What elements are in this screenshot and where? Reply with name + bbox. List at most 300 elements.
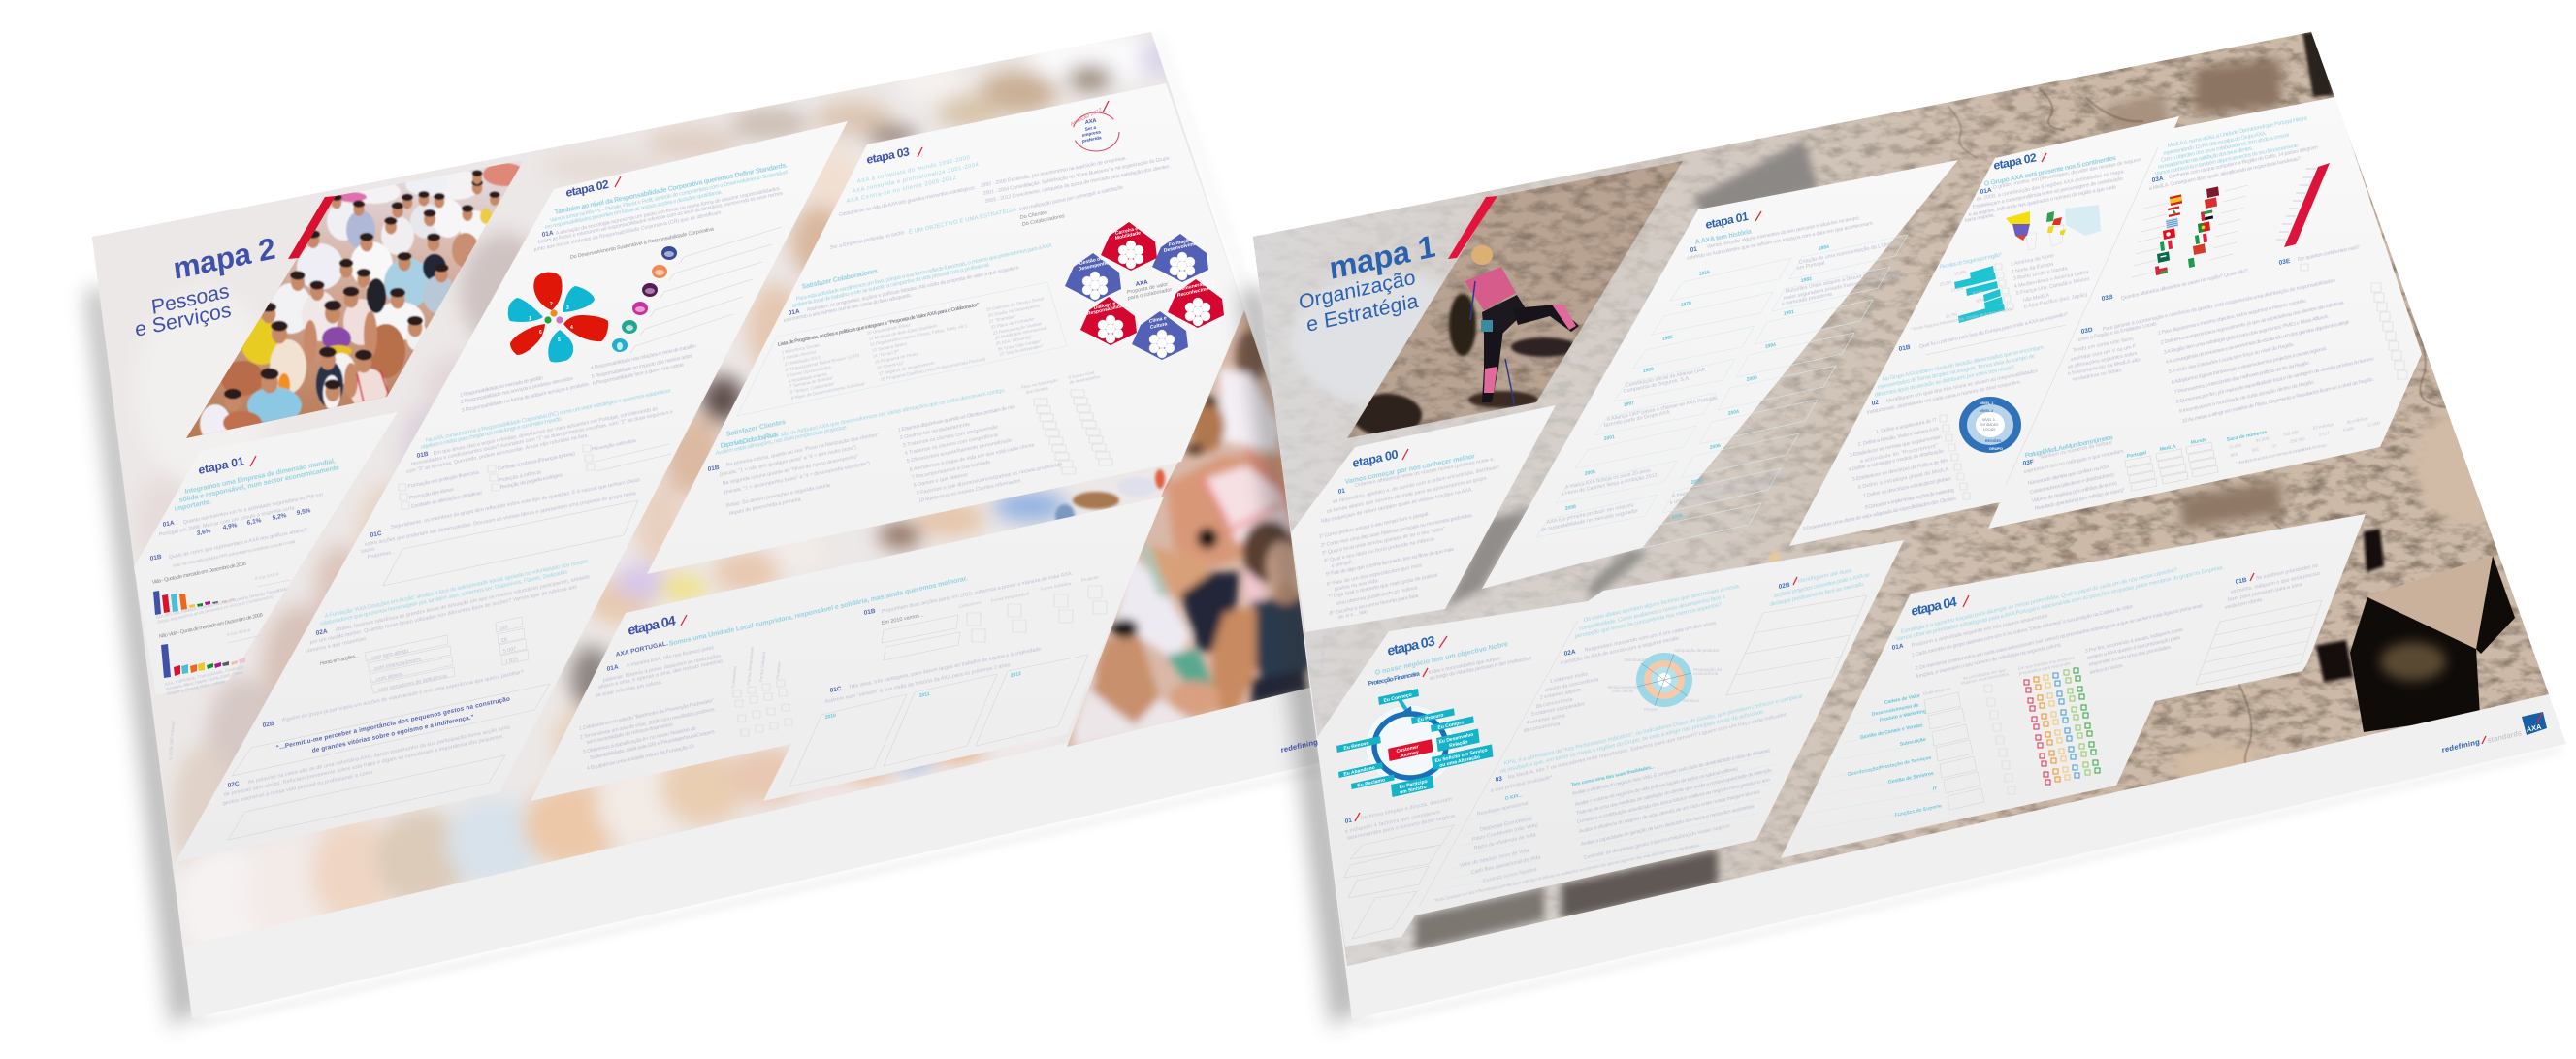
icon: flower of responsibilities: 1 [529,316,531,322]
chart: Não Vida market share bars [159,613,263,696]
etapa 03: satisfazer colaboradores: escrevendo o seu número numa das casas do favo adequado. [784,293,912,324]
MedLA questions: 8 Queremos por fim, pôr meios de especificidade local e de vantagem de decisão próxima do terreno. [2176,356,2375,405]
MedLA questions: Portugal, MedLA e Mundo em números [2024,433,2113,460]
rock photograph background [1241,19,2576,979]
etapa 00 text: e/ou observar, justificando os motivos. [1336,585,1419,607]
etapa 01 text: Nota: Na Vida estão incluídos PPR; percentagens consideram a quota no total. [173,539,296,568]
panel: etapa 00 [1291,405,1556,632]
red list bar [2276,163,2330,247]
diagram: customer journey cycle: Eu Renovo [1343,740,1369,752]
panel: etapa 03 [647,83,1244,574]
etapa 01 text: 01B [149,554,162,562]
etapa 00 text: e porquê. [1332,560,1354,569]
etapa 03 question 02: aquém da concorrência [1545,677,1599,693]
panel: etapa 01 [1482,160,1958,589]
etapa 04 value chain table: Onde estamos [1923,686,1951,696]
etapa 04 text: 2010 [825,713,837,721]
etapa 01 timeline: 1985 [1662,335,1674,342]
etapa 03 question 02: Respondam marcando com um X em cada um dos eixos [1585,621,1717,654]
etapa 02 list and questions: 5 097 [503,646,516,655]
etapa 03: satisfazer colaboradores: 5 Novas Oportunidades [787,365,832,378]
red stripe [1448,196,1497,259]
etapa 03 text: É UM OBJECTIVO E UMA ESTRATÉGIA [908,207,1016,236]
etapa 03: satisfazer colaboradores: 4 “Organizational Talent Review” (OTR) [786,353,860,372]
etapa 04 question 01B: 01B [2235,577,2247,586]
etapa 03 KPI matching: à sua principal finalidade*. [1491,774,1554,794]
etapa 01 timeline: etapa 01 [1705,209,1750,232]
etapa 02 question block and levels [1803,311,2068,532]
etapa 04 text: Três anos, três vantagens, para darem largas ao trabalho de equipa e à criatividade. [849,646,1043,690]
MedLA questions: 13.000 [2229,442,2242,450]
etapa 02 list and questions: Alguém do grupo já participou em acções de voluntariado e tem uma experiência que queira partilhar? [282,669,524,723]
MedLA text: Vamos conhecê-la e também alguns aspectos do seu funcionamento [2155,143,2300,177]
etapa 04 text: A maneira AXA, não nos ficámos pelas [627,645,715,669]
etapa 02 list and questions: 1 823 [505,657,518,665]
etapa 02 question block and levels: a actividade do “Procurement” [1860,443,1938,465]
etapa 03: satisfazer colaboradores: 19 Gabinete do Serviço Social [986,296,1044,312]
etapa 02 question block and levels: 8 Conceber e implementar acções de marketing [1865,488,1954,511]
etapa 00 text: 7º Diga qual o desporto que mais gosta de praticar [1328,572,1438,600]
etapa 03: satisfazer colaboradores: Para esta actividade escolhemos um favo, porque a sua forma reflecte funcionais, o mesmo que pretendemos para a AXA [796,243,1052,303]
MedLA questions: Colaboradores (afectivos e distribuidores) [2030,472,2114,496]
etapa 03 KPI matching: Despesas Económicas [1480,816,1532,833]
chart: receitas de seguros por região: 17,8% [1951,286,1964,293]
etapa 04 text: Em 2010 vamos... [882,612,924,626]
etapa 02 list and questions: de pessoas sem-abrigo. Reflictam brevemente sobre esta frase e digam se consideram a importância dos pequenos [224,734,503,798]
etapa 03: satisfazer clientes: depois de preenchida a primeira. [729,497,802,517]
etapa 03: satisfazer clientes: 2 Ouvimo-los verdadeiramente [900,422,971,441]
MedLA questions: Saca de números [2227,430,2268,443]
divider in etapa 03 [1419,620,1578,907]
etapa 02 list and questions: de grandes vitórias sobre o egoísmo e a indiferença.” [311,714,474,754]
MedLA questions: 2 Definimos compromissos regionalmente, já que as expectativas dos clientes são idênticas. [2161,300,2345,346]
etapa 03 KPI matching: Avaliar a eficiência do negócio de vida, através de um rácio entre nossa margem técnica [1579,789,1760,835]
etapa 04 text: responder a cada uma das prioridades [2089,645,2172,668]
MedLA questions: 4 A convergência de processos e as economias de escala são um dos grandes objectivos a atingir. [2166,319,2350,366]
etapa 03 question 02: 4 estamos acima [1527,713,1565,726]
etapa 02 list and questions: 183 [499,625,508,632]
etapa 01 timeline: 1991 [1784,309,1795,317]
etapa 03 text: 2005 - 2012 Crescimento, conquista de quota de mercado pela satisfação dos clientes. [985,164,1171,205]
etapa 01 timeline: A Aliança UAP passa a chamar-se AXA Portugal, [1607,395,1719,423]
title band: mapa 1: mapa 1 [1328,228,1437,286]
diagram: customer journey cycle: Journey [1400,750,1419,759]
etapa 00 text: 3º Qual o local onde tem/ou gostaria de ter o seu “retiro” [1322,527,1445,557]
etapa 02 list and questions: A Fundação “AXA Corações em Acção” sinaliza a face de solidariedade social, apoiada no voluntariado dos nossos [325,559,588,620]
etapa 01 timeline: 1816 [1699,270,1711,277]
etapa 01 timeline: e uma nova assinatura – Redefining Standards [1670,479,1778,506]
MedLA questions: 9 Incentivamos a mobilidade de curta duração dentro da Região. [2179,379,2315,415]
etapa 04 text: Forma Responsável [991,591,1029,603]
panel: etapa 02 and MedLA [1789,97,2422,546]
panel: etapa 02 [176,121,848,862]
etapa 01 timeline: 1978 [1681,301,1692,308]
etapa 02 list and questions: “...Permitiu-me perceber a importância dos pequenos gestos na construção [275,695,510,752]
icon: flower of responsibilities [508,273,608,363]
divider between etapa 02 and MedLA [2006,147,2158,485]
etapa 02 list and questions: 02C [227,781,240,789]
etapa 00 text: 4º Qual o seu ídolo ou herói preferido na infância [1324,536,1434,564]
etapa 03: satisfazer colaboradores: 22 Plano de Formação [991,316,1035,330]
etapa 03 KPI matching: Cash flow operacional de Vida [1471,854,1541,876]
chart: Vida market share bars: Outras seguradoras ainda presentes no mercado (considerados) [157,594,274,625]
chart: receitas de seguros por região: 5 França Unv, Canadá e México [2016,276,2090,297]
MedLA questions: Alinhem os números da bolsa e [2041,440,2112,461]
etapa 03 question 02B: acções/ projectos concretos onde a AXA se [1774,572,1870,599]
diagram: decision levels circle: NÍVEL 1 [1980,401,1993,405]
etapa 04 text: Proponham duas acções para, em 2010, voltarmos a provar a maneira de estar AXA. [882,571,1073,615]
icon: ambição 2012 stamp [1070,101,1119,151]
etapa 02 list and questions: © 2009 JMF-Champi [168,721,176,760]
chart: receitas de seguros por região: 4 Mediterrâneo e América Latina [2014,270,2089,290]
etapa 02 list and questions: Promoção dos idosos [409,487,455,501]
etapa 03: satisfazer clientes: 3 Tratamos os clientes com compreensão [903,424,998,449]
chart: receitas de seguros por região: * Exclui Seguros Internacionais, Gestão de Activos e Banca [1911,306,2013,332]
etapa 04 value chain table: Produto e Marketing [1880,708,1926,723]
diagram: customer journey cycle: Eu Solicito um Serviço [1434,748,1488,764]
etapa 01 timeline: maior seguradora privada francesa: Claude Bébéar [1784,273,1901,302]
etapa 01 timeline: 1994 [1765,342,1777,350]
etapa 01 timeline: cobrindo os Autocolantes que se refiram nos espaços com a data em que aconteceram. [1687,220,1874,262]
diagram: honeycomb value proposition: Proposta de valor [1127,282,1169,296]
etapa 02 list and questions: Combate à pobreza (Finanças Ignoras) [498,451,575,472]
diagram: decision levels circle: GRUPO [1989,447,2003,451]
etapa 04 text: 01A [1891,643,1904,652]
diagram: customer journey cycle: Eu Conheço [1383,692,1412,704]
etapa 04 value chain table: Coordenação/Prestação de Serviços [1848,755,1932,778]
etapa 01 text: 01A [162,520,175,529]
etapa 02 text: Vamos tomar os três Ps – People, Planet e Profit, símbolo do compromisso com o Desenvolvimento Sustentável [550,170,788,224]
etapa 03: satisfazer clientes: 01B [707,465,720,473]
etapa 03 KPI matching: 03 [1495,776,1503,784]
icon: flower of responsibilities: 2 [550,302,553,307]
etapa 04 text: etapa 04 [1911,594,1958,619]
etapa 02 list and questions: Redução da pegada ecológica [500,472,563,491]
etapa 01 timeline: 2006 [1691,478,1703,486]
etapa 02 list and questions: sobre acções que poderiam ser desenvolvidas. Discutam as vossas ideias e apresentem uma proposta do grupo nesta [365,491,636,548]
etapa 00 text: se necessário, apelido) e, de acordo com a ordem encontrada, distribuam [1333,465,1500,505]
diagram: honeycomb value proposition: Responsabilidade [1087,303,1129,317]
MedLA questions: 03F [2022,459,2034,467]
etapa 03 text: 1992 - 2000 Expansão, por investimento na aquisição de empresas. [981,155,1127,189]
etapa 02 question block and levels: representados de forma simples na imagem. Temos ideia do campo de [1878,354,2035,391]
chart: receitas de seguros por região [1911,252,2090,332]
etapa 01 timeline: Vamos recordar alguns momentos do seu percurso e situá-los no tempo, [1707,215,1860,250]
etapa 03 text: Do Colaboradores [1022,213,1065,228]
etapa 04 text: seleccionadas. [2090,662,2124,676]
etapa 02 question block and levels: 6 Definir a estratégia global da MedLA [1858,466,1949,491]
etapa 03 KPI matching: Valor do negócio novo de Vida [1460,848,1530,869]
etapa 03 text: 2001 - 2004 Consolidação. Sublinhação no “Core Business” e na organização do Grupo. [983,155,1171,197]
etapa 01 timeline [1536,209,1908,548]
etapa 02 list and questions: Combate às alterações climáticas [411,490,483,510]
etapa 02 text: Leiam as frases e relacionem as responsabilidades referidas com os seus destinatários, escrevendo os seus nomes [538,191,784,245]
etapa 01 timeline: 2008 [1565,504,1577,512]
icon: ambição 2012 stamp: preferida [1082,135,1102,144]
logotype: redefining standards: standards [2487,728,2522,745]
diagram: honeycomb value proposition [1065,222,1224,360]
MedLA questions: 4.000 [2343,426,2355,433]
etapa 02 list and questions: 01B [416,451,429,460]
crowd photograph panel [179,155,529,446]
etapa 01 text: importante. [174,497,211,513]
etapa 03: satisfazer colaboradores: 2 Gestão Flexível [783,349,816,361]
MedLA questions: 10 As metas a atingir em matéria de Plano, Orçamento e Resultados fixam-se a nível da Região. [2182,377,2374,425]
etapa 04 text: Forma Solidária [1041,581,1072,592]
diagram: customer journey cycle: ou uma Alteração [1439,754,1480,769]
chart: coloured readiness grid [2024,668,2100,785]
logotype: redefining on mapa 2: redefining [1280,737,1319,754]
etapa 04 text: abaixo a uma, e apenas a uma, das nossas maneiras [598,658,724,690]
etapa 00 text: 2º Conte-nos uma das suas histórias pessoais ou momentos preferidas. [1321,513,1473,549]
MedLA questions: 1 Para disparamos o mesmo objectivo, todos seguimos o mesmo caminho. [2158,298,2307,337]
etapa 02 list and questions: Proteção à infância [499,469,541,484]
etapa 04 text: 2 Os membros posicionados em cada caixa seleccionam (ver anexo) as prioridades estratégicas a que se sentem mais ligados pelas suas [1916,603,2204,672]
etapa 02 list and questions: Propomos... [368,549,396,561]
title band: mapa 1 [1298,228,1437,337]
etapa 01 timeline: Companhia de Seguros, S.A. [1624,375,1690,395]
etapa 01 timeline: A AXA tem história [1694,227,1752,246]
chart: Vida market share bars: AXA, BES Vida, Fidelidade, Ocidental Vida, Allianz, Açoreana, Santander, Tranquilidade [156,586,288,620]
MedLA text: Com o objectivo dos seus colaboradores, tem vindo a crescer [2161,132,2290,164]
chart: receitas de seguros por região: 3 Reino Unido e Irlanda [2013,266,2068,282]
etapa 03 KPI matching [1319,633,1803,903]
diagram: honeycomb value proposition: Clima e [1149,315,1167,325]
MedLA text: Conforme com os que compõem a Região do Golfo, 14 países integram [2169,144,2319,180]
diagram: decision levels circle: NÍVEL 3 [1982,418,1995,422]
etapa 02 list and questions: 1 Responsabilidade no mercado de gestão [460,375,543,399]
diagram: honeycomb value proposition: Desempenho [1079,260,1110,273]
icon: flower of responsibilities: 4 [570,325,573,331]
etapa 03: satisfazer clientes: 1 Estamos disponíveis quando os Clientes pensam de nós [898,404,1016,433]
etapa 02 list and questions: ...com sem-abrigo [368,648,409,662]
etapa 03: satisfazer colaboradores: 25 AXA “University” [996,334,1033,346]
etapa 01 text: Vida - Quota de mercado em Dezembro de 2008 [152,562,246,586]
etapa 00 text [1319,447,1500,621]
diagram: customer journey cycle: Eu Participo [1399,779,1428,790]
etapa 02 text: de 2008, a contribuição das 6 regiões AXA assinaladas no mapa. [1977,169,2125,203]
etapa 03: satisfazer colaboradores: 18 Programa Equilíbrio (Vida Profissional/Vida Pessoal) [881,356,986,382]
diagram: honeycomb value proposition: Mobilidade [1115,230,1141,241]
climber photograph panel [1343,155,1688,446]
MedLA questions: 03B [2101,294,2113,303]
etapa 01 timeline: Mutuelles Unies adquire a Drouot e forma-se a [1786,268,1892,295]
diagram: honeycomb value proposition: Diálogo e [1094,301,1116,311]
chart: receitas de seguros por região: não MedLA [2023,293,2050,304]
etapa 01 timeline: 2000 [1747,375,1758,383]
diagram: honeycomb value proposition: Carreira e [1115,226,1139,237]
etapa 01 text: 4,9% [222,522,238,531]
faded crowd photograph [92,32,1226,918]
etapa 02 text: O Grupo AXA está presente nos 5 continentes [1983,154,2116,188]
etapa 03 KPI matching: Rácio Combinado (não Vida) [1472,822,1538,843]
chart: competitiveness radar: Adequação de produtos [1674,648,1720,653]
etapa 01 text: Integramos uma Empresa de dimensão mundial, [184,457,336,496]
MedLA questions: o funcionamento da MedLA são [2068,357,2141,377]
etapa 04 text: Forma Responsável [746,646,755,685]
etapa 02 list and questions: ...com idosos [372,671,403,684]
etapa 02 list and questions: Abaixo, fazemos referência às grandes áreas de actuação em que os nossos voluntários participaram, tutelado [336,574,590,633]
etapa 01 timeline: é nomeado presidente [1782,292,1833,307]
etapa 00 text: Não esqueçam de referir também quais as vossas funções na AXA. [1321,487,1473,525]
MedLA questions: entre a Região e as Entidades Locais. [2078,321,2158,343]
etapa 04 text: 01C [829,686,842,694]
etapa 04 text: 2 Terminámos um ano de crise, 2008, com resultados positivos, [580,707,716,741]
etapa 03: satisfazer clientes: Peso na fidelização [1021,377,1059,390]
chart: receitas de seguros por região: 1 América do Norte [2011,253,2055,268]
etapa 03: satisfazer colaboradores: 6 Mobilidade Interna [789,371,827,384]
etapa 04 text [579,571,1107,786]
etapa 01 timeline: 2009 [1672,513,1684,521]
MedLA text [2149,115,2319,192]
etapa 04 text: Cumprirnos [959,599,982,609]
diagram: customer journey cycle: Eu Compro [1437,720,1465,731]
etapa 03 question 02 [1524,584,1740,734]
etapa 03: satisfazer colaboradores: 1 Benefícios Sociais [782,342,821,355]
etapa 03 KPI matching: KPIs, é a abreviatura de “Key Performance Indicators”, ou Indicadores Chave de Gestão, que permitem conhecer e comparar [1504,693,1803,767]
etapa 03 question 02: da concorrência [1536,697,1573,710]
etapa 02 text: barra respeita. [1965,212,1995,224]
icon: world map [2006,205,2101,250]
etapa 03 text: Do Clientes [1020,209,1047,221]
etapa 03 question 02: 3 estamos equiparados [1531,701,1586,718]
etapa 03 heading: ao longo da vida das pessoas e das instituições [1430,656,1532,682]
etapa 02 question block and levels: 3 Estabelecer as normas que regulamentam [1850,434,1943,459]
diagram: honeycomb value proposition: Cultura [1150,321,1168,331]
soft shadow of mapa 1 [1240,287,2560,1028]
etapa 02 text: junto aos novos símbolos da Responsabilidade Corporativa (CR) que as identificam. [533,209,723,253]
etapa 04 value chain table: Desenvolvimento de [1872,702,1919,718]
etapa 03: satisfazer colaboradores: 14 “Tempo 5º” [873,348,900,359]
etapa 03 text: cuja realização passa por conseguir a satisfação [1019,185,1123,212]
diagram: customer journey cycle: um Sinistro [1400,785,1427,796]
etapa 04 text: Vamos olhar as prioridades estratégicas para a AXA Portugal e relacioná-las com as posições ocupadas pelos membros do grupo na Empresa. [1896,565,2225,643]
MedLA questions: 5 A visão das Entidades Locais tem força ao nível da Região. [2169,341,2295,375]
etapa 02 text: em responsabilidades presentes em todas as nossas acções e decisões quotidianas. [545,189,724,231]
etapa 00 text: etapa 00 [1352,447,1399,470]
poster sheet [92,32,1392,1018]
diagram: honeycomb value proposition: Remuneração e [1178,279,1215,293]
etapa 03: satisfazer colaboradores: 8 “Tempo: Colaborador” [790,381,836,395]
etapa 03: satisfazer colaboradores: 15 Programa de Férias [875,351,919,365]
etapa 04 text: 01B [863,608,876,617]
chart: competitiveness radar: concorrência [1693,671,1719,676]
etapa 01 text: A Cor AXA é: [255,571,279,581]
etapa 01 text [149,454,339,587]
etapa 03 heading: Protecção Financeira [1368,670,1421,688]
etapa 03: satisfazer clientes: de desempenho [1070,374,1101,385]
etapa 02 question block and levels: 5 Estabelecer as directrizes da Política de RH [1852,458,1948,483]
etapa 02 text: e as regiões, indicando nos quadrados o número da região a que cada [1969,184,2116,218]
etapa 02 question block and levels: 9 Desenvolver uma oferta de valor adaptada às especificidades dos Clientes [1803,496,1957,532]
icon: ambição 2012 stamp: AXA [1085,118,1097,126]
panel: etapa 04 [1781,514,2366,858]
etapa 03 KPI matching: Avaliar a capacidade de geração de lucro deduzido dos riscos e meios dos accionistas [1581,804,1755,848]
etapa 01 timeline: 1999 [1643,367,1655,374]
etapa 03 text: AXA consolida e profissionaliza 2001-2004 [853,162,980,195]
etapa 04 text: etapa 04 [628,613,677,639]
etapa 02 list and questions: Horas em acções... [320,654,360,667]
etapa 04 value chain table: Em que medida nos sentimos [2018,655,2076,671]
etapa 01 timeline: e Henri de Castries lança a Ambição 2012 [1562,472,1658,497]
title band: mapa 1: Organização [1298,266,1417,314]
MedLA questions: 80 milhões [2347,416,2368,425]
etapa 02 question block and levels: 1. Definir a arquitectura de IT [1876,417,1938,435]
MedLA questions: 7 Promovemos o intercâmbio das melhores práticas dentro da Região. [2174,360,2310,396]
etapa 02 list and questions: 6 Responsabilidade face a quem nos rodeia [593,362,684,387]
MedLA text: nomeadamente nas satisfação dos seus clientes. [2158,145,2254,171]
etapa 03 question 02B: destaque positivamente face ao mercado. [1770,581,1866,608]
etapa 02 list and questions: colaboradores que queremos homenagear por, também aqui, sabermos ser: Disponíveis, Fiáveis, Dedicados [320,569,567,627]
etapa 02 question block and levels: institucionais, assinalando em cada caixa o número do nível respectivo. [1867,379,2021,416]
etapa 03: satisfazer colaboradores: 17 Seguros de Intuadramento [879,360,936,376]
etapa 02 text: O gráfico mostra, em percentagem, do valor das receitas de seguros [1993,157,2142,191]
diagram: decision levels circle: ENTIDADES [1980,423,1999,427]
MedLA questions: 53 milhões [2313,422,2334,431]
MedLA text: 03A [2151,176,2164,184]
icons: flags of MedLA countries [2132,185,2248,277]
etapa 03: satisfazer clientes: dos clientes [1026,385,1049,395]
etapa 01 text: 6,1% [246,517,262,527]
etapa 02 question block and levels: 7 Definir as directrizes estratégicas globais [1863,476,1952,499]
etapa 02 question block and levels: 4 Definir a estratégia e modelo de distribuição [1849,448,1944,473]
logo: AXA [2522,712,2547,735]
diagram: honeycomb value proposition: Gestão do [1079,256,1104,267]
etapa 02 list and questions: gestos extensível à nossa vida pessoal ou profissional, e como. [223,769,374,807]
etapa 03: satisfazer colaboradores [737,243,1067,416]
etapa 03: satisfazer colaboradores: 11 Medidas de Bem-Estar Saudável [869,323,937,341]
etapa 03: satisfazer clientes: 7 Recompensamos a sua lealdade [912,460,991,481]
etapa 02 list and questions: 4 Responsabilidade nas relações e meio de trabalho [591,343,696,371]
diagram: customer journey cycle: Eu Abandono [1343,765,1375,778]
etapa 04 question 01B: verde/tom idente. [2225,597,2264,611]
etapa 01 timeline: de sustentabilidade no mercado segurador [1541,508,1639,533]
etapa 01 text: etapa 01 [198,454,245,477]
etapa 03: satisfazer clientes: Avaliem estas afirmações, nas duas perspectivas propostas. [716,425,849,457]
MedLA text: a MedLA. Conseguem dizer quais, identificando as respectivas bandeiras? [2149,156,2301,192]
red stripe [288,196,336,259]
panel: etapa 01 [134,412,398,695]
MedLA questions: MedLA [2160,444,2176,453]
title band: mapa 2: mapa 2 [172,231,277,286]
diagram: decision levels circle: NÍVEL 2 [1980,408,1993,413]
etapa 01 timeline: Constituição oficial da Aliança UAP, [1626,367,1706,389]
etapa 04 text: 2011 [919,691,930,699]
chart: competitiveness radar: com cliente [1612,689,1634,693]
small pink climber reflection [1755,551,1796,594]
etapa 04 text: 01A [606,663,619,673]
etapa 04 text: de estar referidas em coluna. [596,680,662,699]
chart: competitiveness radar [1608,648,1722,712]
etapa 04 value chain table: Gestão de Sinistros [1888,771,1934,786]
etapa 03: satisfazer clientes: Na primeira coluna, quanto ao seu “Peso na fidelização dos clientes” [726,433,879,468]
panel: etapa 03 [1316,540,1904,947]
etapa 03 question 02: a posição da AXA de acordo com a seguinte escala: [1561,635,1680,666]
etapa 01 text: sólida e responsável, num sector economicamente [178,464,339,504]
etapa 02 list and questions: números a que respeitam. [306,636,368,655]
etapa 03: satisfazer clientes: 10 Mantemos os nossos Clientes informados [918,478,1021,504]
etapa 04 text: sem necessidade de reforços financeiros. [587,722,674,746]
etapa 02 list and questions: 02A [315,628,328,637]
etapa 02 text [533,161,788,261]
etapa 03 KPI matching: Trata-se de uma das medidas de satisfação do cliente que avalia a nossa capacidade de retenção [1576,768,1772,817]
etapa 04 text: palavras: fizemos a prova. Associem as realizações [603,654,722,684]
etapa 02 list and questions: com “3” as terceiras. Querendo, podem acrescentar. Áreas não referidas na lista. [405,432,589,475]
diagram: customer journey cycle: Relação [1449,739,1468,749]
etapa 03: satisfazer clientes: Satisfazer Clientes [725,418,786,438]
etapa 00 text: 01 [1337,488,1346,496]
etapa 02 list and questions: 26 [501,637,507,644]
